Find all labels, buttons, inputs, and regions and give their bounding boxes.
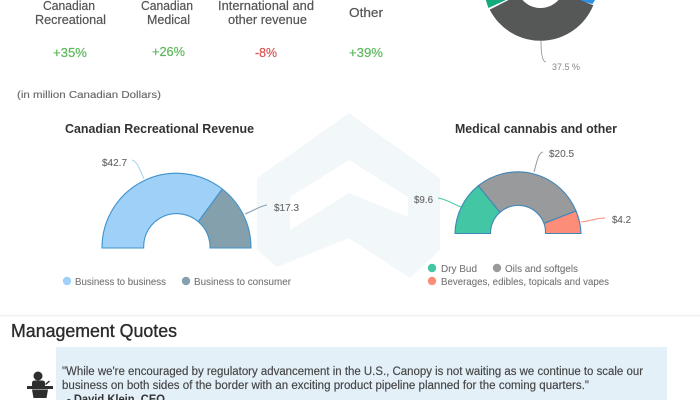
legend: Dry Bud	[441, 263, 477, 275]
leader and value: $4.2	[581, 214, 631, 226]
leader and value: $42.7	[102, 157, 144, 179]
segment: Canadian Recreational	[35, 0, 106, 60]
segment: International and other revenue: other revenue	[228, 13, 307, 27]
segment: Other	[349, 6, 383, 60]
legend: Beverages, edibles, topicals and vapes	[441, 276, 609, 288]
segment: dry bud	[455, 186, 500, 234]
leader and value: $9.6	[414, 194, 461, 207]
segment: International and other revenue: -8%	[255, 45, 277, 60]
chart: Canadian Recreational Revenue	[63, 121, 299, 288]
segment: Canadian Medical: +26%	[152, 44, 185, 59]
leader and value: $17.3: $17.3	[274, 202, 299, 214]
panel: growth by segment	[35, 0, 383, 60]
heading: Medical cannabis and other	[455, 121, 617, 136]
segment: Canadian Recreational: +35%	[53, 45, 87, 60]
leader and value: $20.5	[534, 148, 574, 172]
legend: Business to business	[75, 276, 166, 288]
segment: Canadian Medical: Medical	[147, 13, 190, 27]
segment: business to business	[102, 173, 222, 248]
background watermark: double chevron	[257, 113, 440, 278]
chart: top donut	[486, 0, 595, 73]
heading: Canadian Recreational Revenue	[65, 121, 254, 136]
segment: business to consumer	[198, 189, 251, 248]
quote text	[62, 366, 643, 400]
segment: oils and softgels	[478, 172, 576, 223]
heading: Management Quotes: Management Quotes	[11, 321, 177, 341]
unit note: (in million Canadian Dollars)	[17, 89, 161, 101]
segment: beverages, edibles, topicals and vapes	[544, 211, 581, 234]
quote text: business on both sides of the border with an exciting product pipeline planned for the coming quarters."	[62, 380, 589, 392]
segment: Other: Other	[349, 6, 383, 20]
segment: Other: +39%	[349, 45, 383, 60]
chart: top donut: 37.5 %	[552, 62, 581, 73]
quote text: "While we're encouraged by regulatory advancement in the U.S., Canopy is not waiting as we continue to scale our	[62, 366, 643, 378]
leader and value: $20.5: $20.5	[549, 148, 574, 160]
leader and value: $4.2: $4.2	[612, 214, 631, 226]
segment: Canadian Medical	[141, 0, 193, 59]
legend	[63, 276, 291, 288]
legend: Oils and softgels	[505, 263, 578, 275]
legend	[428, 263, 609, 288]
panel: quote	[56, 347, 667, 400]
segment: Canadian Recreational: Recreational	[35, 13, 106, 27]
icon: speaker at podium	[27, 372, 53, 398]
leader and value: $42.7: $42.7	[102, 157, 127, 169]
chart: Medical cannabis and other	[414, 121, 631, 288]
leader and value: $17.3	[245, 202, 299, 214]
segment: International and other revenue	[218, 0, 314, 60]
leader and value: $9.6: $9.6	[414, 194, 433, 206]
legend: Business to consumer	[194, 276, 291, 288]
